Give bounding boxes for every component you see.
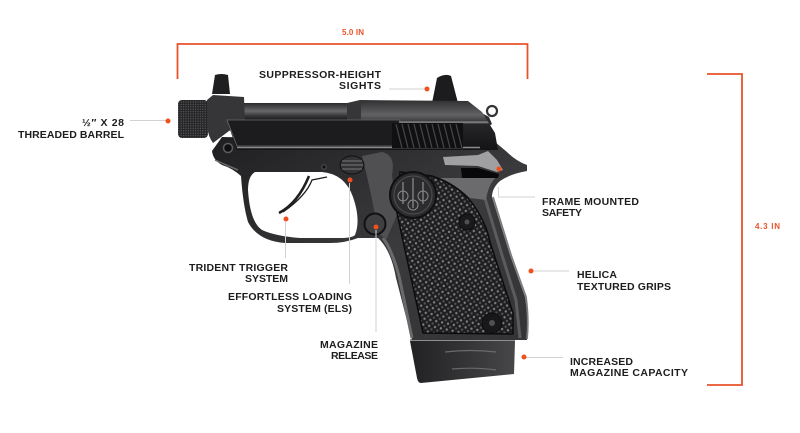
trigger guard opening <box>248 172 358 238</box>
callout: suppressor-height sights <box>259 69 430 92</box>
front sight <box>212 74 230 94</box>
callout: magazine release: MAGAZINE <box>320 339 378 351</box>
muzzle block <box>207 95 245 143</box>
callout: trident trigger system <box>189 216 288 285</box>
rear sight <box>432 75 458 103</box>
callout: increased magazine capacity: MAGAZINE CAPACITY <box>570 367 688 379</box>
magazine <box>410 340 515 383</box>
slide <box>227 100 498 150</box>
callout: suppressor-height sights: SIGHTS <box>339 80 381 92</box>
dimension: overall length <box>178 28 528 79</box>
callout: threaded barrel: ½″ X 28 <box>82 117 124 129</box>
magazine release button <box>364 214 386 234</box>
callout: trident trigger system: SYSTEM <box>245 273 288 285</box>
callout: helica textured grips: HELICA <box>577 269 617 281</box>
pistol illustration <box>178 74 528 383</box>
dimension: overall height <box>707 74 780 385</box>
dimension: overall length: 5.0 IN <box>342 28 364 37</box>
callout: frame mounted safety: SAFETY <box>542 207 582 219</box>
frame safety lever <box>443 151 503 178</box>
callout: increased magazine capacity <box>522 354 688 379</box>
callout: effortless loading system: EFFORTLESS LOADING <box>228 291 352 303</box>
callout: helica textured grips <box>528 268 671 293</box>
callout: helica textured grips: TEXTURED GRIPS <box>577 281 671 293</box>
callout: frame mounted safety: FRAME MOUNTED <box>542 196 639 208</box>
callout: frame mounted safety <box>496 166 639 219</box>
logo medallion <box>390 172 436 218</box>
callout: threaded barrel: THREADED BARREL <box>18 129 125 141</box>
frame pins and loading button <box>224 144 364 174</box>
callout: trident trigger system: TRIDENT TRIGGER <box>189 262 288 274</box>
callout: effortless loading system <box>228 178 352 315</box>
callout: effortless loading system: SYSTEM (ELS) <box>277 303 352 315</box>
barrel <box>243 103 349 121</box>
hammer ring <box>480 106 497 128</box>
trigger <box>279 176 327 213</box>
callout: increased magazine capacity: INCREASED <box>570 356 633 368</box>
callout: suppressor-height sights: SUPPRESSOR-HEIGHT <box>259 69 382 81</box>
callout: magazine release: RELEASE <box>331 350 378 362</box>
callout: threaded barrel <box>18 117 170 141</box>
callout: magazine release <box>320 224 378 362</box>
dimension: overall height: 4.3 IN <box>755 222 780 231</box>
textured grip panel <box>397 172 513 334</box>
threaded muzzle <box>178 100 208 138</box>
frame and trigger guard <box>212 137 528 340</box>
